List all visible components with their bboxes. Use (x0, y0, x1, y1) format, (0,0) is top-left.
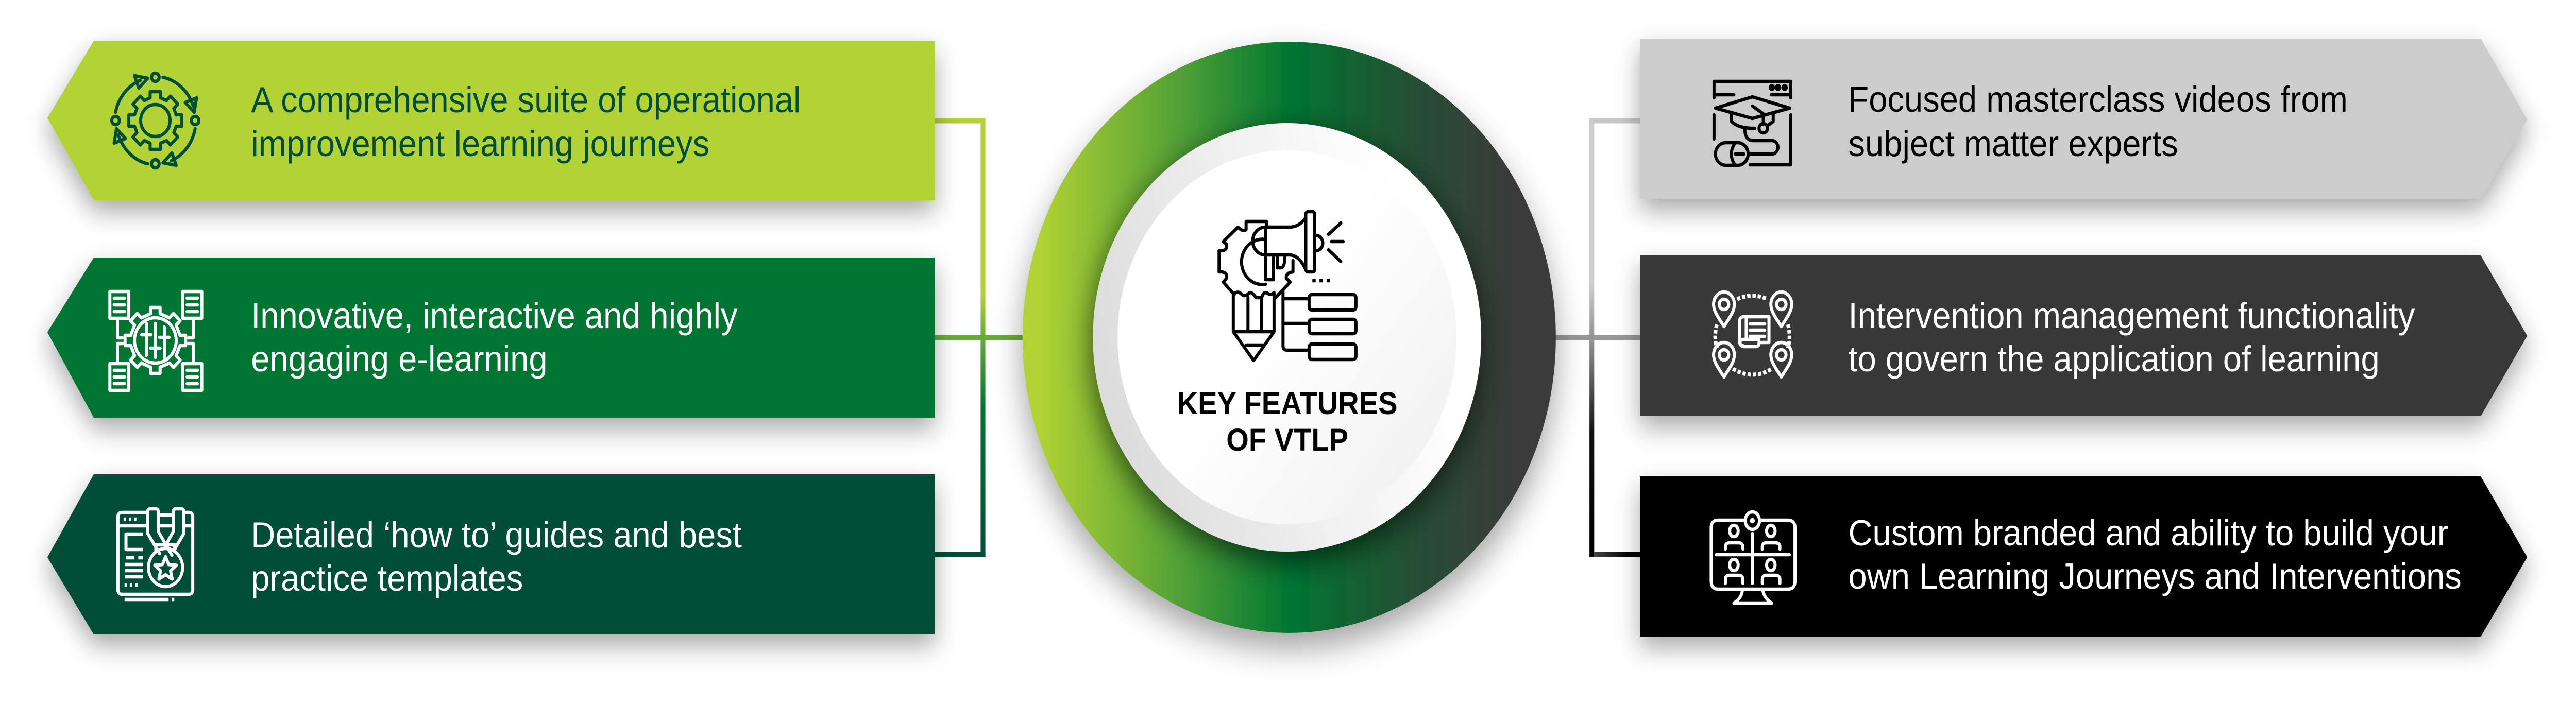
right connector lines (1553, 118, 1640, 557)
text: custom branded (1849, 512, 2462, 597)
panel: interactive e-learning (47, 258, 935, 418)
panel: custom branded learning journeys (1640, 476, 2527, 637)
panel: intervention management (1640, 255, 2527, 416)
text: how-to guides: practice templates (251, 558, 523, 599)
panel: masterclass videos (1640, 39, 2527, 199)
text: operational improvement (251, 79, 801, 164)
central circle: key features of VTLP (1023, 42, 1556, 633)
heading: key features of VTLP: KEY FEATURES (1177, 386, 1398, 421)
text: how-to guides (251, 514, 742, 599)
text: custom branded: Custom branded and ability to build your (1849, 512, 2448, 554)
text: masterclass videos: subject matter experts (1849, 123, 2178, 164)
icon: document with medal (118, 509, 193, 599)
icon: gear with cycle arrows (112, 73, 199, 168)
panel: operational improvement learning journeys (47, 41, 935, 200)
text: interactive e-learning: engaging e-learning (251, 338, 548, 380)
icon: monitor with four people (1711, 512, 1795, 603)
icon: gear with sliders and documents (110, 291, 202, 390)
heading: key features of VTLP (1177, 386, 1398, 458)
icon: graduation cap on browser window (1714, 81, 1791, 165)
text: custom branded: own Learning Journeys and Interventions (1849, 556, 2462, 597)
text: intervention management: Intervention management functionality (1849, 295, 2415, 336)
left connector lines (935, 118, 1025, 557)
text: operational improvement: A comprehensive suite of operational (251, 79, 801, 121)
icon: location pins around document (1714, 292, 1792, 377)
icon: megaphone, gear, pencil and lists (1219, 212, 1356, 360)
panel: how-to guides (47, 474, 935, 634)
text: interactive e-learning (251, 295, 738, 380)
text: interactive e-learning: Innovative, interactive and highly (251, 295, 738, 336)
heading: key features of VTLP: OF VTLP (1226, 423, 1348, 458)
text: masterclass videos (1849, 79, 2348, 164)
text: how-to guides: Detailed ‘how to’ guides and best (251, 514, 742, 556)
inner white disc (1117, 150, 1456, 524)
text: operational improvement: improvement learning journeys (251, 123, 709, 164)
text: intervention management (1849, 295, 2415, 380)
text: masterclass videos: Focused masterclass videos from (1849, 79, 2348, 120)
text: intervention management: to govern the application of learning (1849, 338, 2380, 380)
light middle ring (1093, 123, 1481, 552)
gradient outer ring (1023, 42, 1556, 633)
